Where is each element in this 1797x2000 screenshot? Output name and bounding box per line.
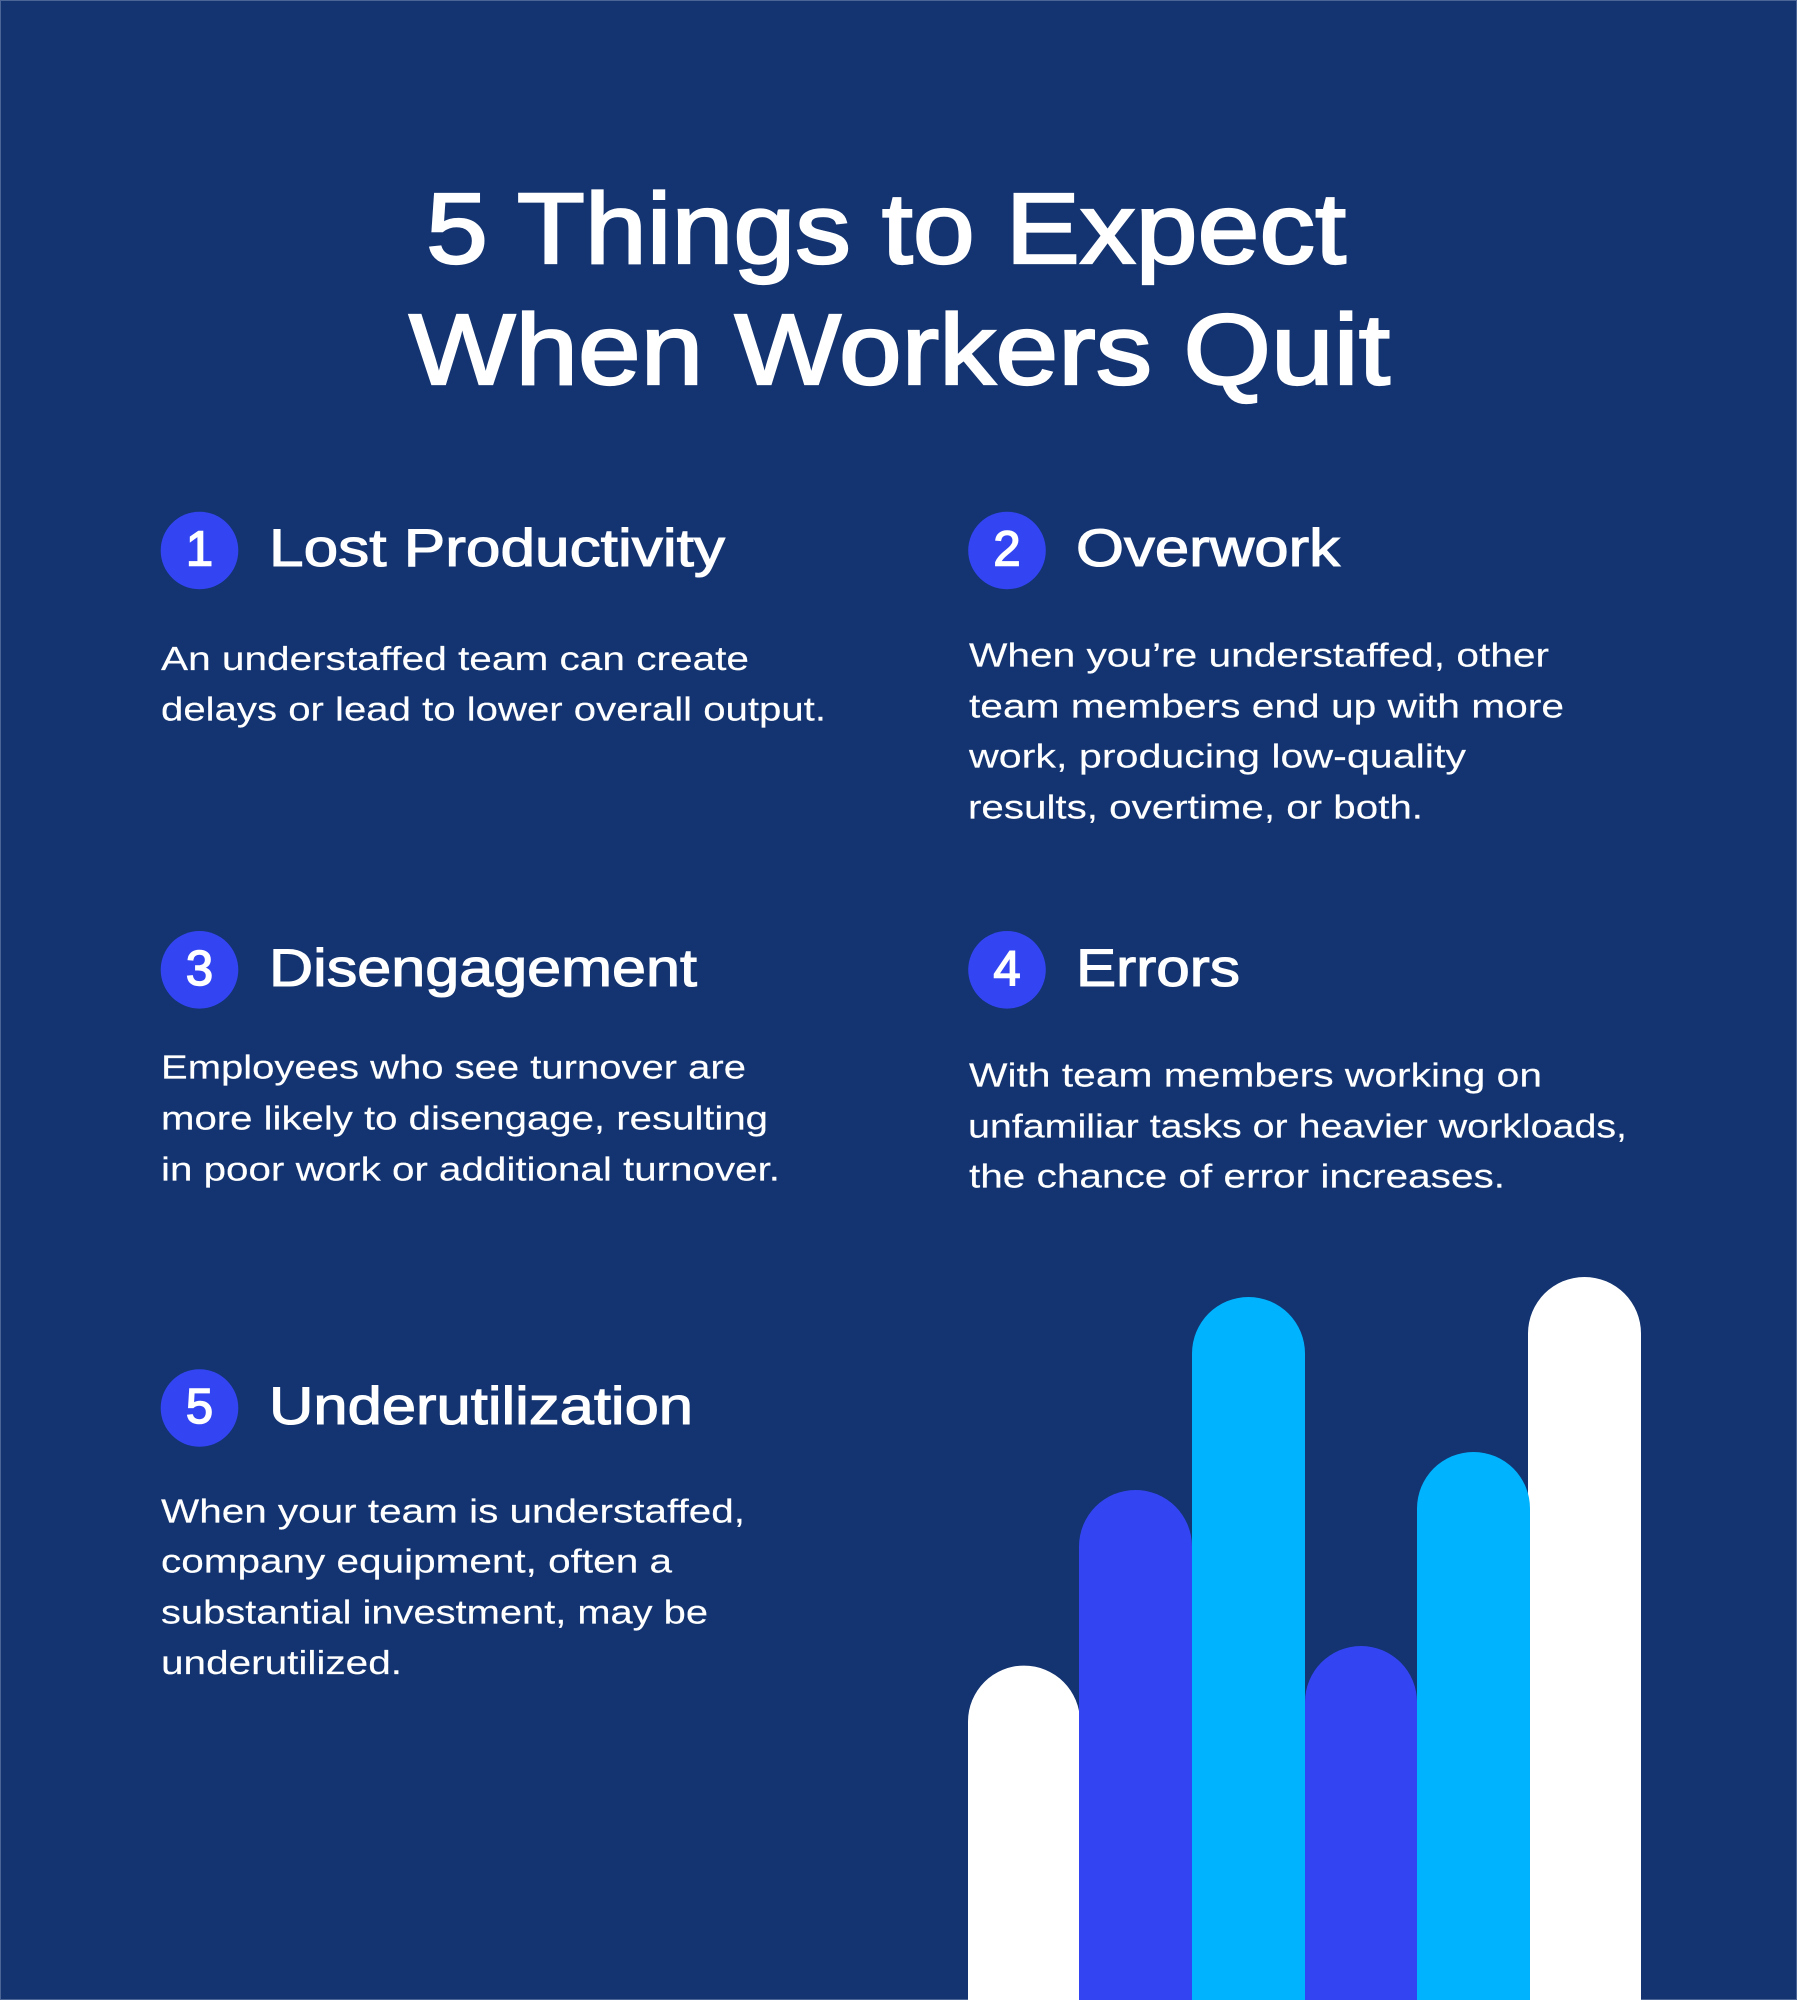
number badge 4 [968,931,1046,1009]
body text: overwork: work, producing low-quality [968,738,1467,775]
number badge 1: 1 [186,522,213,576]
number badge 3: 3 [186,942,213,996]
heading: lost productivity: Lost Productivity [269,519,726,578]
heading: underutilization: Underutilization [269,1377,693,1436]
panel: item 3 disengagement [161,931,780,1188]
decorative bar chart [968,1277,1641,2000]
body text: errors [968,1057,1627,1195]
body text: lost productivity: An understaffed team can create [161,640,749,677]
number badge 2: 2 [993,522,1021,576]
number badge 2 [968,512,1046,589]
body text: lost productivity [161,640,826,728]
title: 5 Things to Expect [426,173,1346,285]
number badge 1 [161,512,238,589]
body text: underutilization: company equipment, often a [161,1543,673,1580]
body text: disengagement: in poor work or additional turnover. [161,1150,780,1188]
bar 2: blue [1079,1490,1192,2000]
title [409,173,1390,406]
bar 4: blue [1305,1646,1417,2000]
body text: errors: the chance of error increases. [969,1158,1505,1195]
panel: item 1 lost productivity [161,512,826,728]
body text: underutilization: When your team is understaffed, [161,1492,745,1529]
body text: errors: unfamiliar tasks or heavier workloads, [968,1107,1627,1144]
number badge 5: 5 [186,1380,213,1434]
body text: overwork [968,637,1564,825]
body text: overwork: team members end up with more [969,687,1564,724]
panel: item 5 underutilization [161,1369,745,1681]
body text: disengagement: more likely to disengage, resulting [161,1099,768,1136]
body text: disengagement [161,1048,780,1188]
body text: overwork: results, overtime, or both. [968,788,1423,825]
body text: overwork: When you’re understaffed, other [969,637,1549,674]
body text: underutilization [161,1492,745,1681]
bar 1: white [968,1666,1080,2000]
title: When Workers Quit [409,294,1390,406]
body text: underutilization: substantial investment, may be [161,1593,708,1630]
body text: errors: With team members working on [969,1057,1542,1094]
number badge 3 [161,931,238,1009]
body text: lost productivity: delays or lead to lower overall output. [161,691,826,728]
heading: errors: Errors [1076,939,1240,998]
bar 3: cyan [1192,1297,1305,2000]
number badge 5 [161,1369,238,1447]
bar 6: white [1528,1277,1641,2000]
heading: disengagement: Disengagement [269,939,697,998]
panel: item 4 errors [968,931,1627,1195]
body text: underutilization: underutilized. [161,1644,402,1681]
panel: item 2 overwork [968,512,1564,825]
heading: overwork: Overwork [1076,519,1341,578]
body text: disengagement: Employees who see turnover are [161,1048,746,1085]
bar 5: cyan [1417,1452,1530,2000]
number badge 4: 4 [993,942,1021,996]
